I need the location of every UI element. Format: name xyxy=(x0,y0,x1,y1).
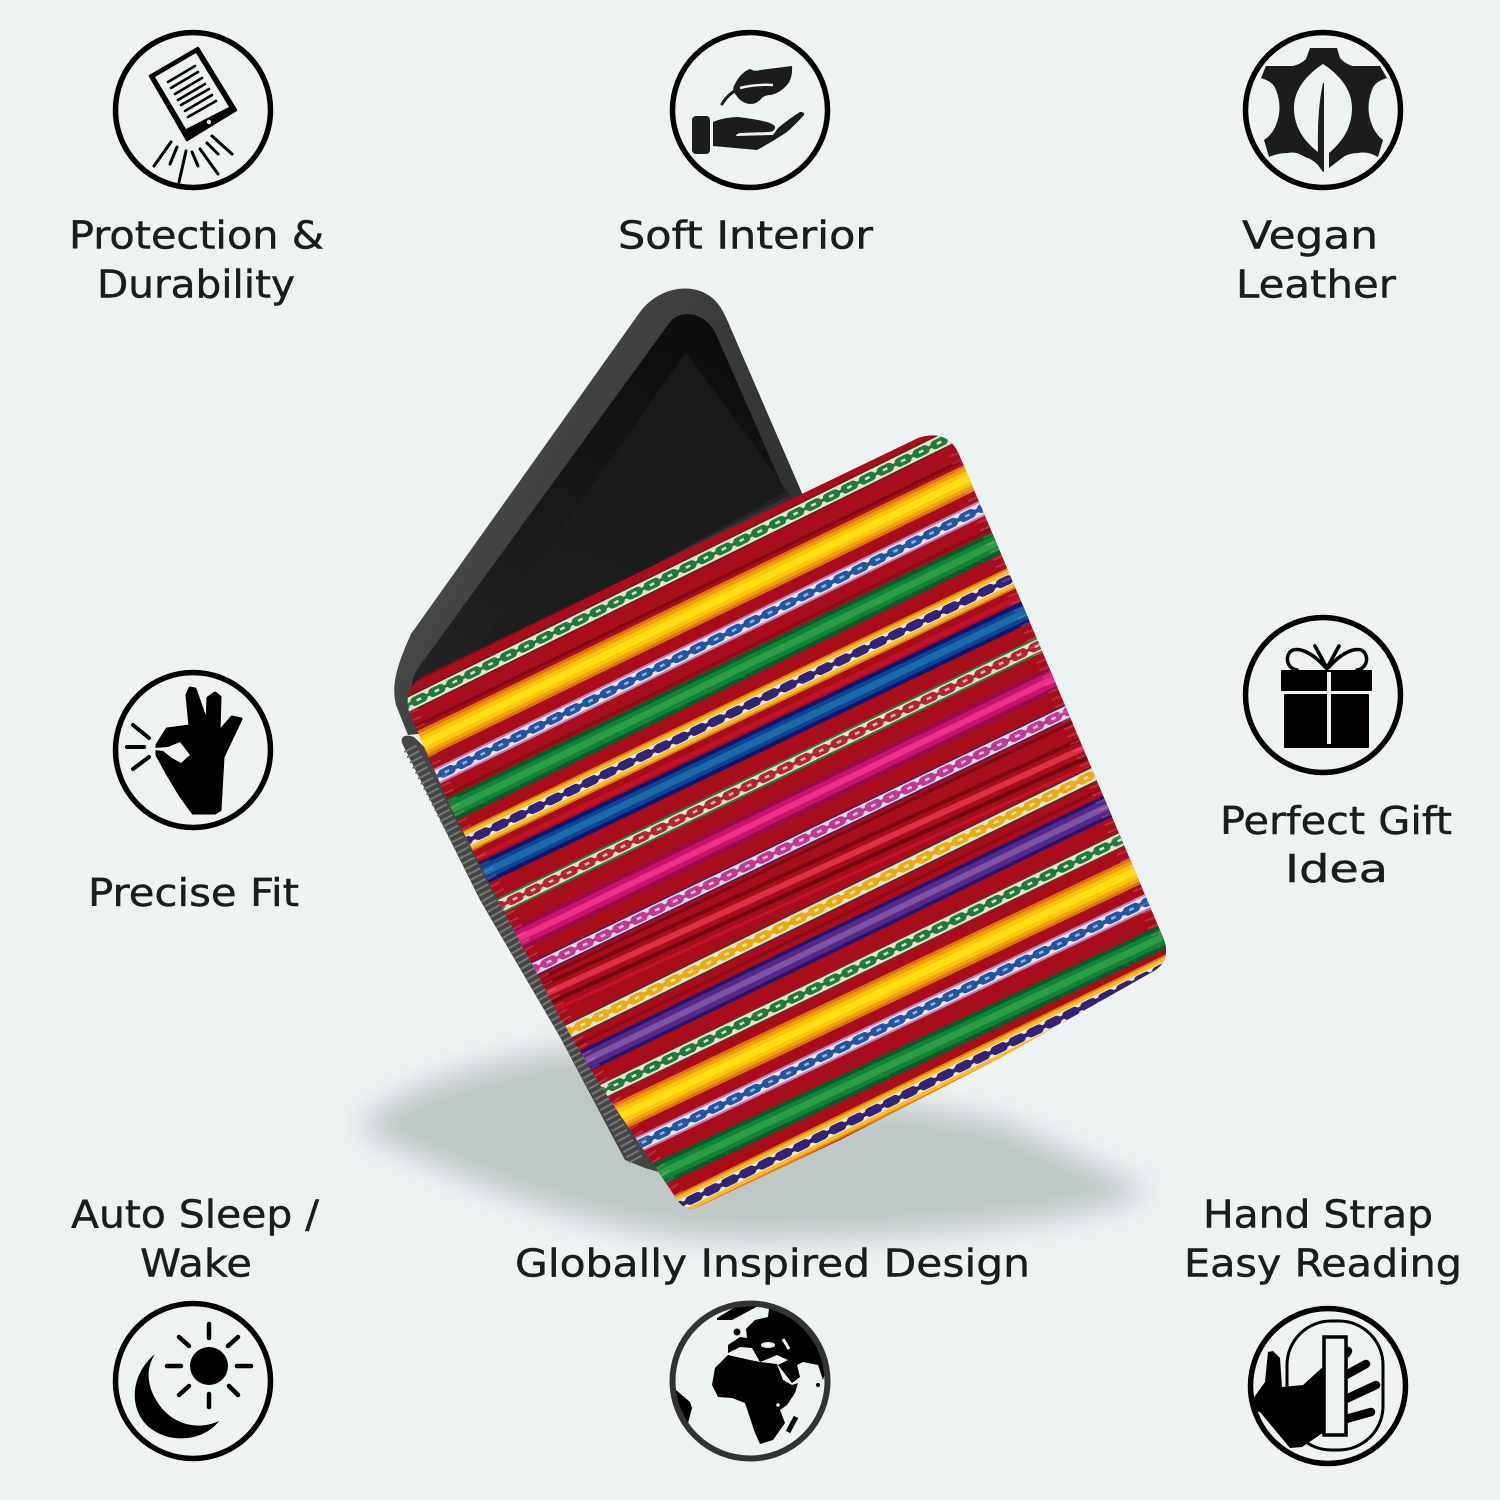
quilted cover edge xyxy=(409,452,1162,1198)
label: Easy Reading xyxy=(1184,1242,1462,1286)
stripe: yellow band lower xyxy=(589,858,1163,1131)
stripe: purple band xyxy=(558,793,1135,1074)
label: Hand Strap xyxy=(1203,1192,1433,1236)
stripe: yellow chain xyxy=(564,766,1098,1038)
stripe: pink chain xyxy=(531,704,1070,976)
icon: hand holding strap xyxy=(1245,1308,1406,1464)
feature: perfect gift idea xyxy=(1220,618,1452,891)
stripe: purple chain bottom xyxy=(674,954,1166,1208)
icon: sun and moon xyxy=(116,1304,270,1458)
label: Leather xyxy=(1236,262,1396,306)
elastic hand strap xyxy=(402,736,720,1190)
label: Perfect Gift xyxy=(1220,799,1452,843)
product: e-reader with woven cover xyxy=(379,289,1210,1220)
stripe: blue band xyxy=(458,598,1055,885)
feature: vegan leather xyxy=(1236,32,1400,306)
feature: auto sleep and wake xyxy=(71,1192,319,1458)
product shadow xyxy=(358,1048,1150,1240)
e-reader shell xyxy=(394,289,805,735)
feature: globally inspired design xyxy=(515,1242,1030,1458)
icon: tablet with impact rays xyxy=(116,32,270,188)
stripe: blue chain lower xyxy=(635,894,1151,1151)
label: Vegan xyxy=(1242,214,1378,258)
stripe: green chain lower xyxy=(600,832,1125,1097)
label: Idea xyxy=(1285,847,1388,891)
icon: OK hand gesture xyxy=(116,672,270,828)
stripe: ridges xyxy=(414,459,1102,1046)
label: Precise Fit xyxy=(88,871,299,915)
stripe: purple chain on yellow xyxy=(442,565,1039,853)
label xyxy=(69,214,324,306)
woven striped cover xyxy=(408,435,1166,1208)
stripe: blue chain xyxy=(434,501,985,784)
label xyxy=(71,1192,319,1286)
icon: gift box xyxy=(1246,618,1400,772)
feature: precise fit xyxy=(88,672,299,915)
stripe: pink band xyxy=(493,664,1083,951)
label: Wake xyxy=(140,1242,252,1286)
stripe: yellow band xyxy=(394,465,996,758)
stripe: green band xyxy=(446,532,1001,820)
label xyxy=(1220,799,1452,891)
icon: globe xyxy=(660,1300,840,1458)
feature: soft interior xyxy=(618,32,873,258)
stripe: green band lower xyxy=(653,926,1166,1184)
label: Protection & xyxy=(69,214,324,258)
stripe: green chain top xyxy=(408,436,954,713)
label: Globally Inspired Design xyxy=(515,1242,1030,1286)
icon: leather hide with leaf xyxy=(1246,32,1400,188)
feature: protection and durability xyxy=(69,32,324,306)
feature: hand strap easy reading xyxy=(1184,1192,1462,1464)
label: Soft Interior xyxy=(618,214,873,258)
stripe: red and green chain xyxy=(497,638,1042,912)
label xyxy=(1184,1192,1462,1286)
label: Durability xyxy=(97,262,295,306)
icon: hand holding leaf xyxy=(672,32,828,188)
label: Auto Sleep / xyxy=(71,1192,319,1236)
label xyxy=(1236,214,1396,306)
